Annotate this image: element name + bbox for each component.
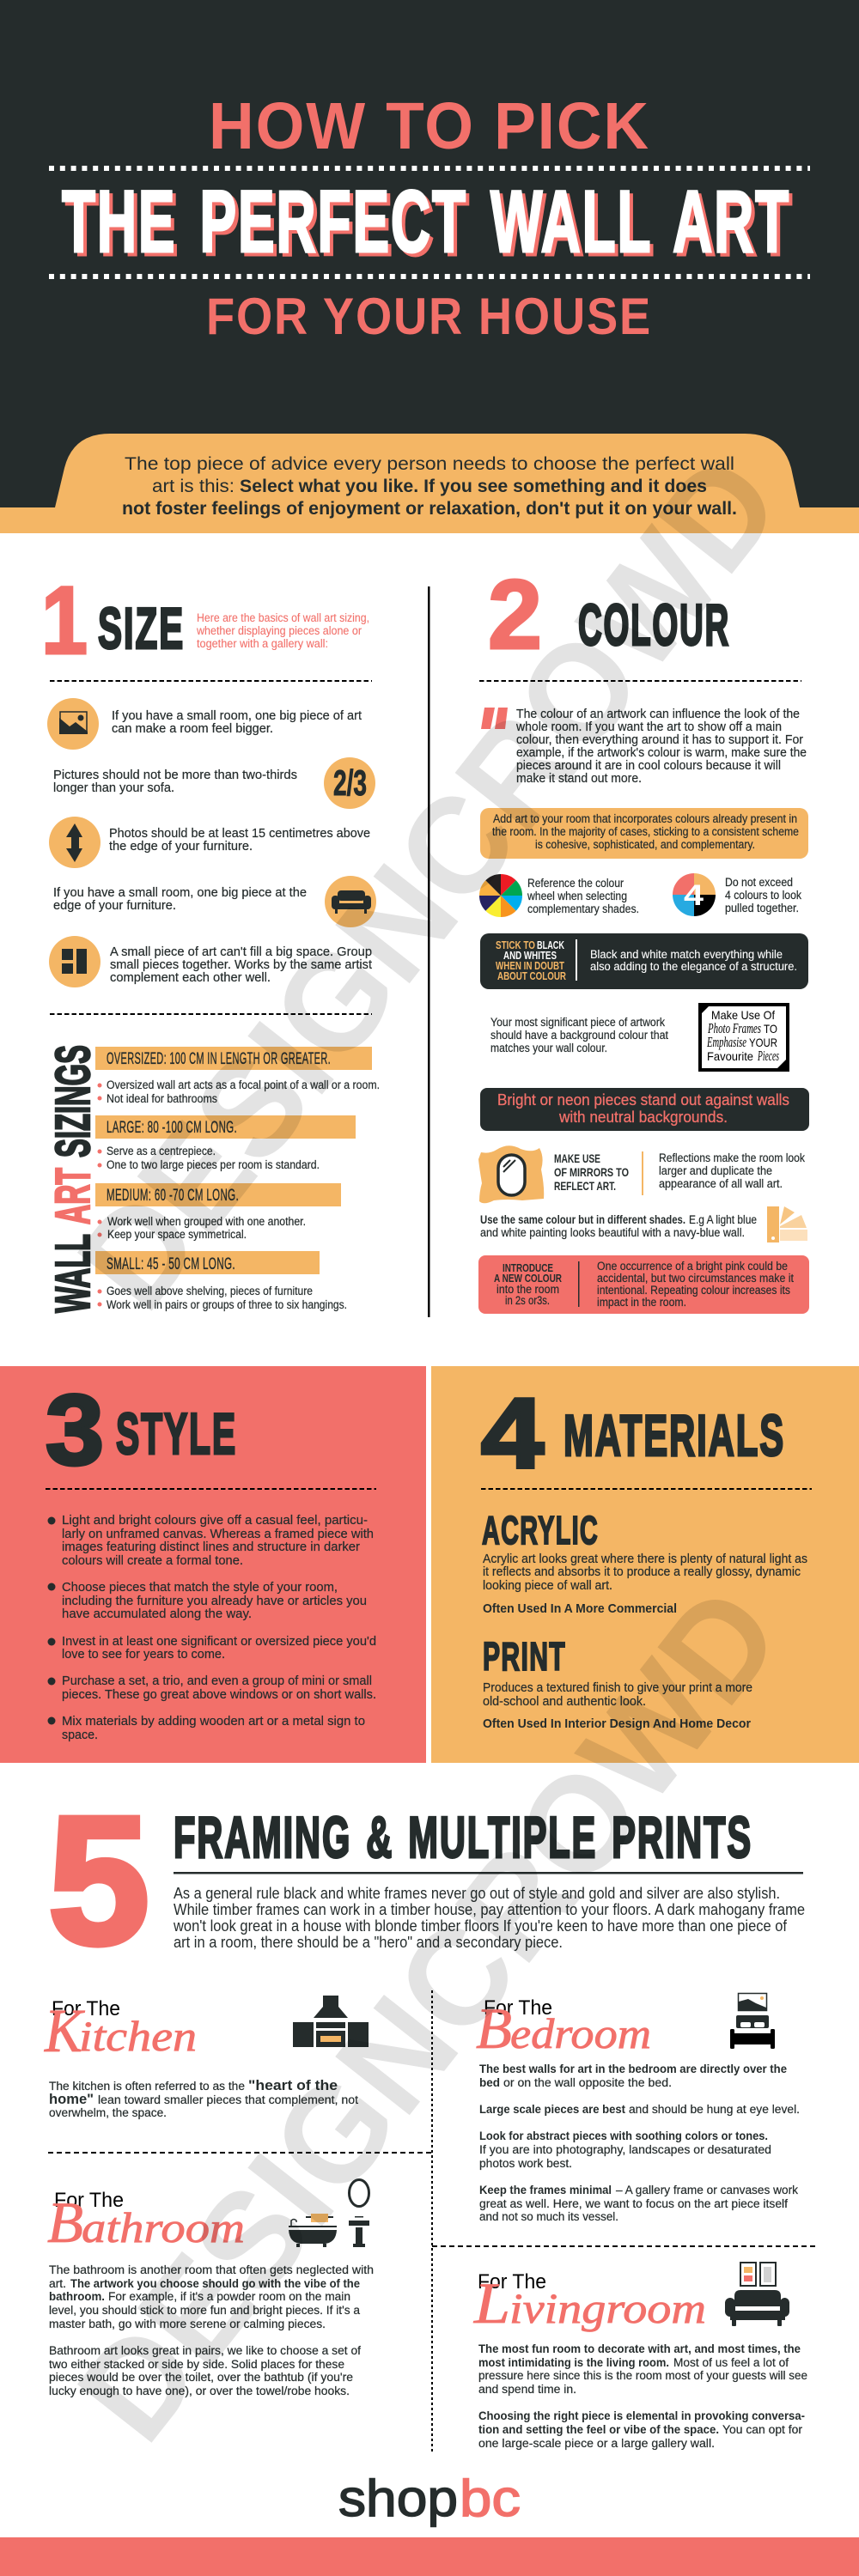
tip: shades: and white painting looks beautiful with a navy-blue wall.: [480, 1226, 745, 1240]
tip: colour wheel: [527, 877, 639, 916]
callout: neon pieces: with neutral backgrounds.: [558, 1108, 728, 1126]
style bullet list: Choose pieces that match the style of your room,: [62, 1580, 338, 1595]
tip: furniture edge: If you have a small room, one big piece at the: [53, 885, 307, 900]
bedroom text: and not so much its vessel.: [479, 2210, 618, 2224]
callout: new colour: INTRODUCE: [503, 1262, 553, 1274]
bathroom text: pieces would be over the toilet, over the bathtub (if you're: [49, 2371, 353, 2385]
living room text: and spend time in.: [478, 2383, 576, 2397]
framed sign: TO: [764, 1022, 777, 1036]
style bullet list: larly on unframed canvas. Whereas a framed piece with: [62, 1527, 374, 1541]
bathroom text: art.: [49, 2277, 66, 2291]
callout: black and white: WHEN IN DOUBT: [496, 960, 564, 972]
framed sign: [698, 1003, 789, 1072]
icon: two thirds: 2/3: [333, 762, 367, 803]
colour influence paragraph: whole room. If you want the art to show off a main: [515, 720, 782, 734]
tip: two thirds: [53, 768, 297, 795]
material: acrylic: looking piece of wall art.: [483, 1578, 612, 1593]
watermark upper: DESIGNCROWD: [48, 428, 809, 1336]
sizing: medium: Work well when grouped with one another.: [107, 1215, 306, 1229]
icon: bath and sink: [289, 2179, 369, 2247]
kitchen heading: itchen: [79, 2012, 197, 2060]
material: acrylic: ACRYLIC: [482, 1508, 599, 1552]
number 3: 3: [46, 1374, 104, 1485]
logo: shopbc: [338, 2470, 521, 2527]
kitchen heading: [44, 1996, 197, 2065]
style bullet list: space.: [62, 1728, 98, 1742]
bathroom text: two either stacked or side by side. Solid places for these: [49, 2358, 344, 2372]
colour influence paragraph: example, if the artwork's colour is warm, make sure the: [516, 745, 807, 760]
tip: small room: [112, 708, 362, 736]
room: bathroom: [47, 2179, 374, 2398]
style bullet list: Light and bright colours give off a casual feel, particu-: [62, 1513, 368, 1528]
callout: new colour: impact in the room.: [597, 1296, 686, 1309]
intro text: art is this:: [152, 477, 235, 496]
style bullet list: including the furniture you already have or articles you: [62, 1594, 367, 1608]
kitchen heading: K: [44, 1996, 86, 2065]
tip: background colour: [490, 1016, 668, 1055]
title line: how to pick: HOW TO PICK: [209, 89, 650, 163]
watermark lower: DESIGNCROWD: [48, 1559, 809, 2468]
icon: swatch fan: [767, 1206, 807, 1242]
sizing: large: [95, 1115, 356, 1172]
bedroom text: Look for abstract pieces with soothing colors or tones.: [479, 2129, 768, 2143]
bathroom text: [49, 2263, 374, 2398]
material: print: old-school and authentic look.: [483, 1694, 646, 1709]
tip: background colour: matches your wall colour.: [490, 1042, 607, 1055]
framing paragraph: As a general rule black and white frames never go out of style and gold and silver are also stylish.: [174, 1885, 780, 1902]
number 4: 4: [481, 1377, 544, 1489]
heading: colour: COLOUR: [578, 592, 730, 658]
intro text: not foster feelings of enjoyment or relaxation, don't put it on your wall.: [122, 499, 737, 519]
callout: new colour: [478, 1255, 809, 1314]
kitchen text: The kitchen is often referred to as the: [49, 2080, 245, 2093]
callout: new colour: into the room: [497, 1283, 559, 1296]
sizing: small: SMALL: 45 - 50 CM LONG.: [107, 1255, 235, 1273]
heading: style: STYLE: [116, 1401, 237, 1467]
callout: black and white: ABOUT COLOUR: [497, 970, 566, 982]
living room heading: [473, 2270, 706, 2336]
tip: group pieces: small pieces together. Works by the same artist: [110, 957, 373, 972]
bathroom heading: [47, 2189, 245, 2255]
tip: background colour: Your most significant piece of artwork: [490, 1016, 666, 1030]
tip: four colours: pulled together.: [725, 902, 799, 915]
size intro text: together with a gallery wall:: [197, 637, 328, 650]
framed sign: Photo Frames: [707, 1020, 761, 1036]
material: acrylic: it reflects and absorbs it to produce a really glossy, dynamic: [483, 1564, 801, 1579]
callout: black and white: STICK TO: [496, 939, 535, 951]
sizing: medium: [95, 1183, 341, 1242]
icon: four colours: 4: [684, 879, 704, 912]
style bullet list: colours will create a formal tone.: [62, 1553, 243, 1568]
living room text: You can opt for: [722, 2423, 802, 2437]
tip: two thirds: Pictures should not be more than two-thirds: [53, 768, 297, 782]
material: print: [483, 1634, 752, 1731]
tip: furniture edge: [53, 885, 307, 913]
sizing: oversized: OVERSIZED: 100 CM IN LENGTH OR GREATER.: [107, 1050, 331, 1068]
style bullet list: pieces. These go great above windows or on short walls.: [62, 1687, 376, 1702]
room: bedroom: [476, 1994, 800, 2224]
icon: mirror: [478, 1145, 544, 1203]
panel: intro tab: [0, 434, 859, 533]
bathroom text: Bathroom art looks great in pairs, we like to choose a set of: [49, 2344, 361, 2358]
bathroom text: master bath, go with more serene or calming pieces.: [49, 2318, 326, 2331]
tip: four colours: [725, 876, 802, 915]
sizing: small: [95, 1251, 347, 1312]
sizing: medium: Keep your space symmetrical.: [107, 1228, 247, 1242]
callout: black and white: also adding to the elegance of a structure.: [590, 960, 797, 974]
style bullet list: Invest in at least one significant or oversized piece you'd: [62, 1634, 376, 1649]
callout: new colour: One occurrence of a bright pink could be: [597, 1260, 788, 1273]
footer band: [0, 2537, 859, 2576]
panel: section 3 style: [0, 1366, 426, 1763]
intro text: Select what you like. If you see something and it does: [240, 477, 707, 496]
bathroom heading: athroom: [82, 2203, 245, 2251]
material: acrylic: [482, 1508, 807, 1616]
tip: mirrors heading: MAKE USE: [554, 1151, 600, 1165]
kitchen text: home": [49, 2091, 94, 2107]
style bullet list: Mix materials by adding wooden art or a metal sign to: [62, 1714, 365, 1728]
living room text: Most of us feel a lot of: [673, 2356, 789, 2370]
bathroom heading: For The: [54, 2189, 124, 2212]
tip: shades: [480, 1213, 757, 1240]
bedroom text: great as well. Here, we want to focus on the art piece itself: [479, 2197, 788, 2211]
bathroom text: level, you should stick to more fun and bright pieces. If it's a: [49, 2304, 360, 2318]
living room text: Choosing the right piece is elemental in provoking conversa-: [478, 2409, 805, 2423]
sizing: medium: MEDIUM: 60 -70 CM LONG.: [107, 1187, 239, 1205]
icon: colour wheel: [479, 874, 522, 917]
tip: four colours: 4 colours to look: [725, 889, 802, 902]
bedroom heading: B: [476, 1996, 512, 2061]
colour influence paragraph: [515, 707, 807, 786]
living room heading: L: [473, 2270, 510, 2336]
icon: quote marks: [481, 708, 508, 729]
panel: section 4 materials: [431, 1366, 859, 1763]
callout: new colour: accidental, but two circumstances make it: [597, 1272, 794, 1285]
tip: group pieces: complement each other well.: [110, 970, 271, 985]
tip: background colour: should have a background colour that: [490, 1029, 668, 1042]
sizing: large: One to two large pieces per room is standard.: [107, 1158, 320, 1172]
sizing: oversized: Not ideal for bathrooms: [107, 1092, 217, 1106]
intro text: [122, 454, 737, 519]
panel: section 1 size: [41, 567, 380, 1313]
framed sign: Favourite: [707, 1049, 753, 1063]
colour influence paragraph: pieces around it are in cool colours because it will: [516, 758, 781, 773]
tip: mirrors heading: OF MIRRORS TO: [554, 1165, 629, 1179]
framing paragraph: [173, 1885, 805, 1951]
callout: incorporate colours: is cohesive, sophisticated, and complementary.: [535, 838, 755, 852]
callout: black and white: BLACK: [537, 939, 564, 951]
material: acrylic: Often Used In A More Commercial: [483, 1601, 677, 1616]
style bullet list: Purchase a set, a trio, and even a group of mini or small: [62, 1674, 372, 1688]
number 2: 2: [488, 561, 542, 670]
tip: four colours: Do not exceed: [725, 876, 793, 890]
icon: kitchen: [293, 1996, 369, 2047]
living room text: one large-scale piece or a large gallery wall.: [478, 2437, 715, 2451]
icon: sofa with frames: [725, 2263, 789, 2326]
callout: neon pieces: [480, 1088, 809, 1131]
callout: incorporate colours: [480, 808, 808, 859]
icon: two thirds: [324, 757, 375, 809]
sizing: large: LARGE: 80 -100 CM LONG.: [107, 1119, 237, 1137]
material: print: PRINT: [483, 1634, 566, 1679]
kitchen text: [49, 2077, 358, 2120]
living room text: pressure here since this is the room most of your guests will see: [478, 2369, 807, 2383]
bedroom text: photos work best.: [479, 2157, 572, 2171]
kitchen text: overwhelm, the space.: [49, 2106, 167, 2120]
tip: shades: E.g A light blue: [689, 1213, 757, 1227]
tip: colour wheel: wheel when selecting: [527, 890, 627, 903]
tip: colour wheel: Reference the colour: [527, 877, 624, 890]
kitchen heading: For The: [52, 1997, 120, 2020]
bedroom text: Keep the frames minimal: [479, 2184, 612, 2197]
colour influence paragraph: make it stand out more.: [516, 771, 642, 786]
material: print: Produces a textured finish to give your print a more: [483, 1680, 752, 1695]
tip: reflections: [659, 1151, 806, 1191]
callout: black and white: Black and white match everything while: [590, 948, 783, 962]
callout: black and white: [480, 933, 808, 989]
bedroom text: – A gallery frame or canvases work: [616, 2184, 799, 2197]
callout: black and white: AND WHITES: [503, 950, 557, 962]
living room text: The most fun room to decorate with art, and most times, the: [478, 2342, 801, 2356]
living room heading: For The: [478, 2270, 546, 2293]
bathroom text: bathroom.: [49, 2290, 105, 2304]
tip: photos height: the edge of your furniture.: [109, 839, 253, 854]
logo: shopbc: bc: [460, 2470, 521, 2527]
tip: two thirds: longer than your sofa.: [53, 781, 174, 795]
icon: height arrow: [49, 817, 101, 868]
bathroom text: For example, if it's a powder room on the main: [108, 2290, 350, 2304]
framed sign: Make Use Of: [711, 1008, 775, 1022]
tip: photos height: Photos should be at least 15 centimetres above: [109, 826, 370, 841]
icon: bed: [730, 1994, 775, 2049]
intro text: The top piece of advice every person needs to choose the perfect wall: [125, 454, 734, 474]
style bullet list: love to see for years to come.: [62, 1647, 225, 1662]
bathroom text: The bathroom is another room that often gets neglected with: [49, 2263, 374, 2277]
framing paragraph: While timber frames can work in a timber house, pay attention to your floors. A dark mahogany frame: [174, 1901, 805, 1918]
size intro text: Here are the basics of wall art sizing,: [197, 611, 369, 624]
framing paragraph: art in a room, there should be a "hero" and a secondary piece.: [174, 1934, 563, 1951]
size intro text: [196, 611, 369, 650]
number 1: 1: [41, 567, 88, 674]
material: acrylic: Acrylic art looks great where there is plenty of natural light as: [483, 1552, 807, 1566]
tip: group pieces: A small piece of art can't fill a big space. Group: [110, 945, 372, 959]
bedroom text: If you are into photography, landscapes or desaturated: [479, 2143, 771, 2157]
style bullet list: have accumulated along the way.: [62, 1607, 252, 1621]
callout: new colour: A NEW COLOUR: [494, 1273, 562, 1285]
colour influence paragraph: The colour of an artwork can influence the look of the: [516, 707, 800, 721]
tip: group pieces: [110, 945, 373, 985]
callout: incorporate colours: the room. In the majority of cases, sticking to a consistent scheme: [492, 825, 799, 839]
tip: mirrors heading: [554, 1151, 629, 1193]
bedroom heading: For The: [484, 1996, 552, 2020]
sizing: oversized: Oversized wall art acts as a focal point of a wall or a room.: [107, 1078, 380, 1092]
tip: reflections: appearance of all wall art.: [659, 1177, 783, 1191]
bathroom heading: B: [47, 2190, 83, 2255]
bedroom text: or on the wall opposite the bed.: [503, 2076, 672, 2090]
sizing: small: Work well in pairs or groups of three to six hangings.: [107, 1298, 347, 1312]
colour influence paragraph: colour, then everything around it has to support it. For: [516, 732, 803, 747]
framed sign: YOUR: [749, 1036, 777, 1049]
tip: photos height: [109, 826, 370, 854]
title line: for your house: FOR YOUR HOUSE: [206, 288, 652, 345]
room: kitchen: [44, 1996, 369, 2120]
living room text: most intimidating is the living room.: [478, 2356, 669, 2370]
bathroom text: lucky enough to have one), or over the towel/robe hooks.: [49, 2385, 350, 2398]
heading: size: SIZE: [98, 596, 185, 661]
sizing: small: Goes well above shelving, pieces of furniture: [107, 1285, 313, 1298]
icon: gallery grid: [49, 936, 101, 987]
kitchen text: lean toward smaller pieces that complement, not: [98, 2093, 358, 2107]
bedroom text: bed: [479, 2076, 500, 2090]
number 5: 5: [48, 1778, 149, 1982]
icon: four colours: [673, 873, 716, 916]
bedroom text: [479, 2063, 800, 2224]
bedroom heading: edroom: [510, 2009, 651, 2057]
logo: shopbc: shop: [338, 2470, 458, 2527]
bedroom text: The best walls for art in the bedroom are directly over the: [479, 2063, 787, 2076]
tip: small room: If you have a small room, one big piece of art: [112, 708, 362, 723]
framed sign: Pieces: [757, 1048, 779, 1064]
living room text: [478, 2342, 807, 2451]
bedroom heading: [476, 1996, 651, 2061]
living room heading: ivingroom: [509, 2284, 706, 2332]
tip: reflections: larger and duplicate the: [659, 1164, 772, 1178]
callout: incorporate colours: Add art to your room that incorporates colours already present in: [493, 812, 797, 826]
framing paragraph: won't look great in a house with blonde timber floors If you're keen to have more than one piece of: [173, 1917, 788, 1935]
vertical heading: wall art sizings: SIZINGS: [46, 1045, 101, 1157]
tip: reflections: Reflections make the room look: [659, 1151, 806, 1165]
tip: shades: Use the same colour but in different shades.: [480, 1213, 685, 1227]
sizing: large: Serve as a centrepiece.: [107, 1145, 216, 1158]
callout: neon pieces: Bright or neon pieces stand out against walls: [497, 1091, 789, 1109]
sizing: oversized: [95, 1047, 380, 1106]
panel: section 5 framing: [44, 1778, 816, 2452]
size intro text: whether displaying pieces alone or: [196, 624, 362, 637]
tip: small room: can make a room feel bigger.: [112, 721, 273, 736]
living room text: tion and setting the feel or vibe of the space.: [478, 2423, 719, 2437]
style bullet list: images featuring distinct lines and structure in darker: [62, 1540, 360, 1554]
vertical heading: wall art sizings: [46, 1045, 101, 1313]
callout: new colour: intentional. Repeating colour increases its: [597, 1284, 790, 1297]
bedroom text: and should be hung at eye level.: [629, 2103, 800, 2117]
room: living room: [473, 2263, 807, 2451]
framed sign: Emphasise: [706, 1034, 746, 1050]
icon: picture: [47, 698, 99, 750]
tip: mirrors heading: REFLECT ART.: [554, 1179, 616, 1193]
callout: new colour: in 2s or3s.: [505, 1294, 550, 1307]
vertical heading: wall art sizings: ART: [46, 1168, 101, 1224]
panel: header: [0, 0, 859, 507]
icon: sofa: [325, 876, 376, 927]
bathroom text: The artwork you choose should go with the vibe of the: [70, 2277, 360, 2291]
kitchen text: "heart of the: [248, 2077, 338, 2093]
panel: section 2 colour: [478, 561, 809, 1314]
tip: furniture edge: edge of your furniture.: [53, 898, 176, 913]
bedroom text: Large scale pieces are best: [479, 2103, 625, 2117]
style bullet list: [48, 1513, 376, 1742]
tip: colour wheel: complementary shades.: [527, 902, 639, 916]
material: print: Often Used In Interior Design And Home Decor: [483, 1716, 751, 1731]
vertical heading: wall art sizings: WALL: [46, 1234, 101, 1313]
